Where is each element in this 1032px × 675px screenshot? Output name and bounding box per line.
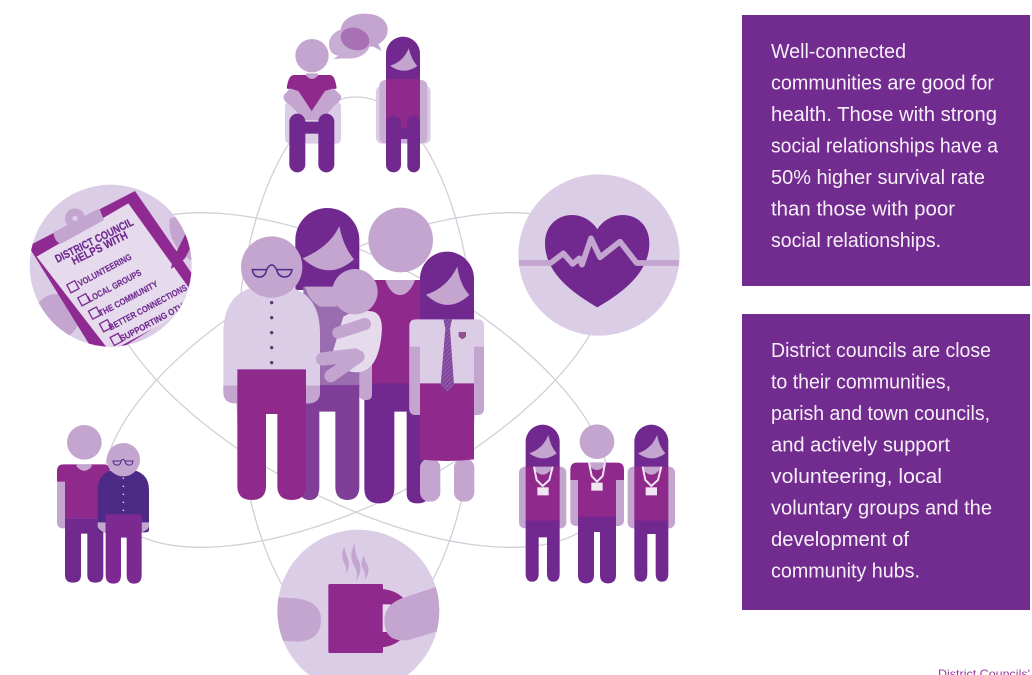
panel: district councils text: community hubs. xyxy=(771,560,920,582)
panel: survival rate text: Well-connected xyxy=(771,41,906,63)
pencil hand xyxy=(169,217,192,261)
central family group xyxy=(223,208,484,503)
baby xyxy=(323,269,382,376)
circle: hands holding mug xyxy=(275,530,442,675)
pulse line xyxy=(519,238,679,265)
father xyxy=(364,208,433,503)
checklist text: THE COMMUNITY xyxy=(97,279,160,318)
checklist text xyxy=(54,219,187,341)
heart xyxy=(545,215,649,307)
speech bubbles xyxy=(329,14,388,59)
panel: district councils text: District councils are close xyxy=(771,340,991,362)
mug xyxy=(328,584,405,653)
panel: survival rate text: 50% higher survival rate xyxy=(771,167,985,189)
left hand xyxy=(275,597,321,642)
panel: survival rate text: health. Those with strong xyxy=(771,104,997,126)
panel: district councils text xyxy=(742,314,1030,610)
figures: younger and older person xyxy=(57,425,149,584)
figures: two people talking xyxy=(283,14,431,172)
clipboard board xyxy=(31,191,192,347)
checklist text: HELPS WITH xyxy=(70,230,130,268)
checklist text: VOLUNTEERING xyxy=(76,252,133,288)
checklist text: BETTER CONNECTIONS xyxy=(107,283,189,332)
network orbit lines xyxy=(54,97,658,643)
panel: district councils text: voluntary groups and the xyxy=(771,498,992,520)
mother xyxy=(295,208,372,500)
younger person xyxy=(57,425,110,583)
checkboxes xyxy=(67,281,122,345)
schoolgirl xyxy=(409,252,484,502)
right hand xyxy=(384,585,442,640)
circle: heart with pulse xyxy=(518,174,680,336)
panel: survival rate text: than those with poor xyxy=(771,198,955,220)
paper xyxy=(37,203,200,352)
panel: survival rate text: social relationships have a xyxy=(771,136,999,158)
older person xyxy=(98,443,149,584)
panel: survival rate text: social relationships. xyxy=(771,230,941,252)
woman left xyxy=(519,425,566,582)
panel: district councils text: volunteering, local xyxy=(771,466,942,488)
checklist text: SUPPORTING OTHERS xyxy=(118,294,200,343)
seated person xyxy=(283,39,341,172)
panel: district councils text: and actively support xyxy=(771,434,950,456)
figures: team with lanyards xyxy=(519,424,675,583)
panel: district councils text: to their communities, xyxy=(771,372,951,394)
hand xyxy=(38,294,78,336)
man centre xyxy=(570,424,624,583)
panel: survival rate text: communities are good for xyxy=(771,72,994,94)
standing woman xyxy=(376,37,431,172)
woman right xyxy=(628,425,675,582)
checklist text: DISTRICT COUNCIL xyxy=(53,217,136,266)
grandfather xyxy=(223,236,320,500)
steam xyxy=(342,543,368,582)
checklist text: LOCAL GROUPS xyxy=(86,268,143,304)
clip xyxy=(53,208,104,243)
panel: district councils text: development of xyxy=(771,529,909,551)
panel: district councils text: parish and town councils, xyxy=(771,403,990,425)
panel: survival rate text xyxy=(742,15,1030,286)
circle: clipboard checklist xyxy=(30,184,192,347)
